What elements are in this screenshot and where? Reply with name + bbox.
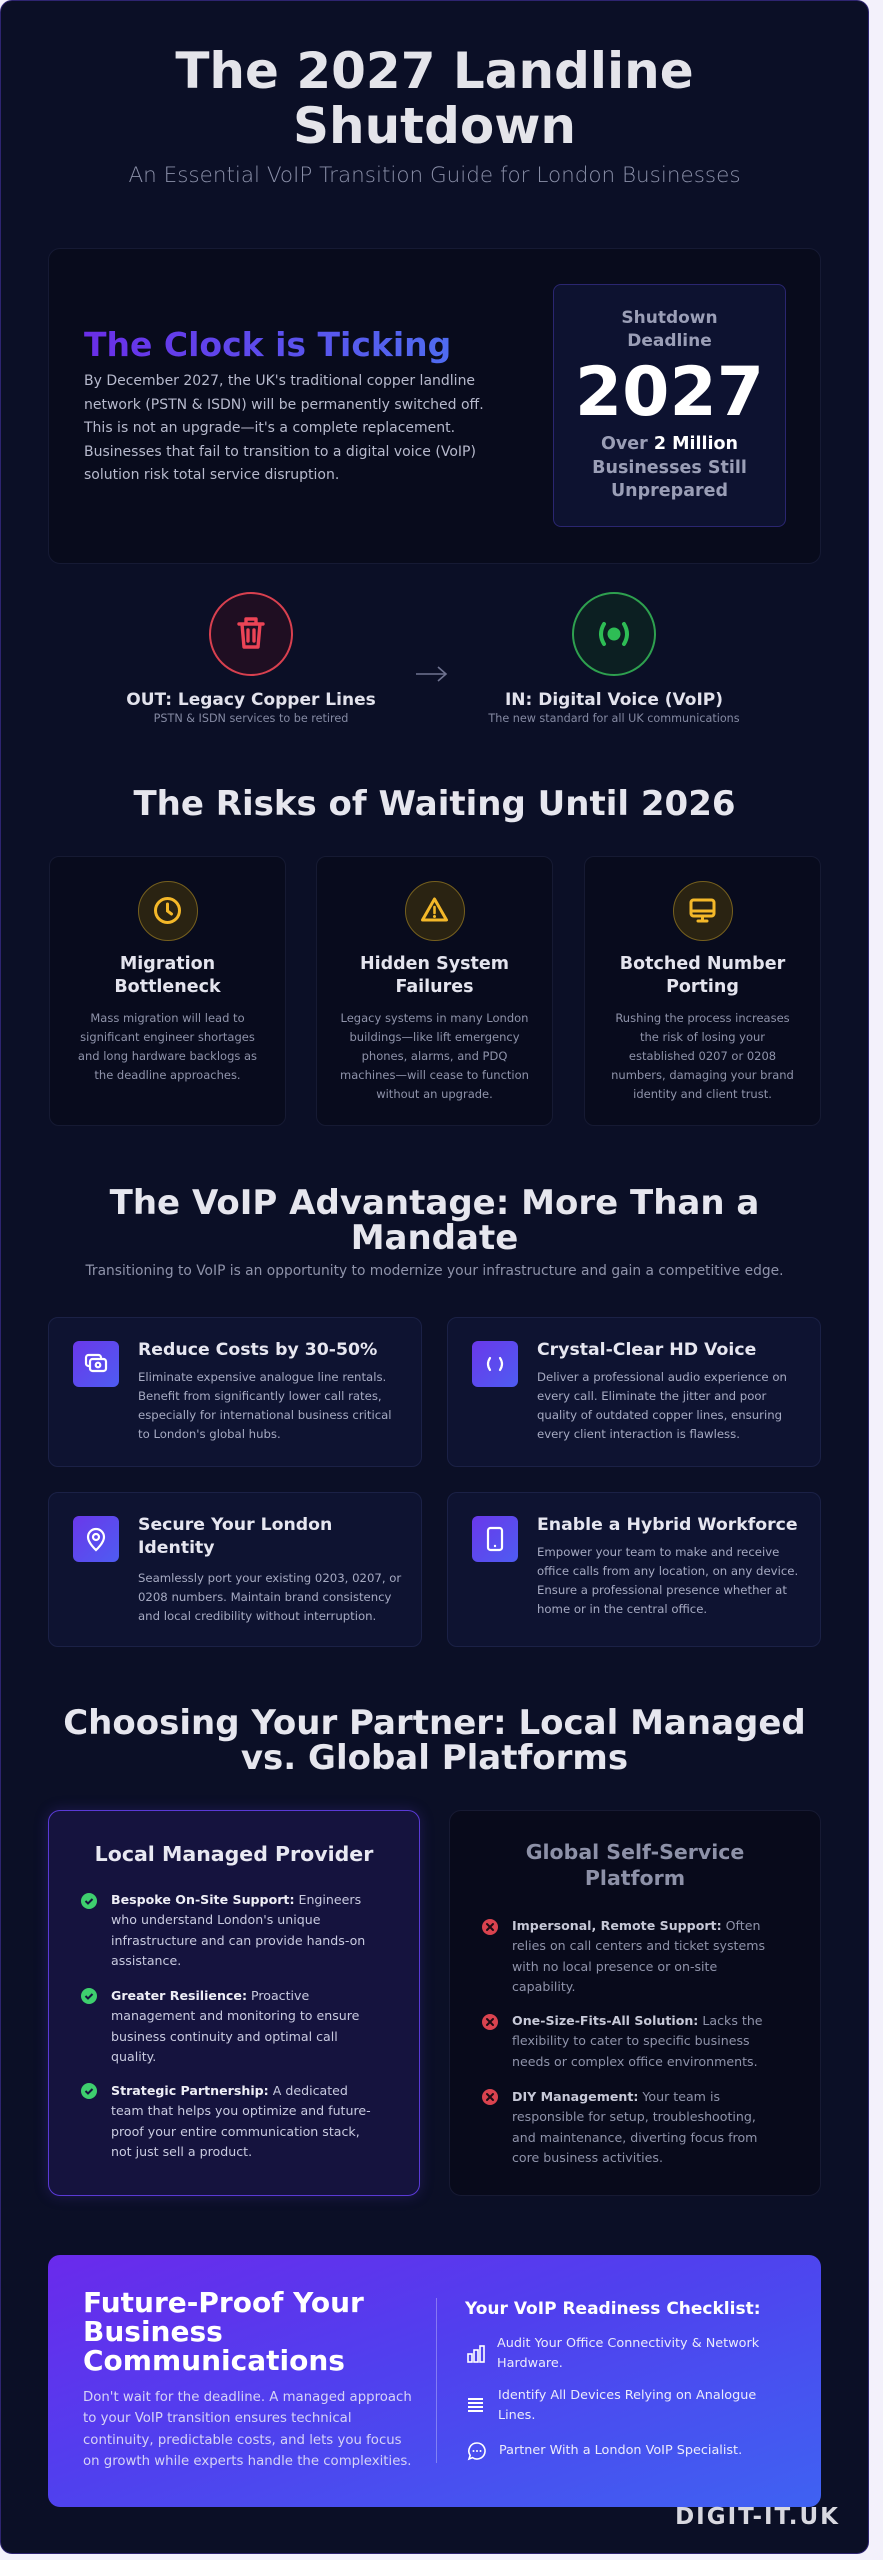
deadline box: Shutdown [621,308,718,328]
item: diy: core business activities. [512,2150,663,2165]
heading: global [526,1840,744,1890]
item: diy [512,2089,757,2165]
risk card: migration bottleneck: Migration [120,954,215,974]
icon: money [73,1341,119,1387]
label: out legacy copper [126,690,376,725]
panel: call to action [48,2255,821,2507]
adv card: reduce costs: Reduce Costs by 30-50% [138,1340,377,1360]
arrow [416,666,447,682]
icon: in voip circle [572,592,656,676]
adv card: hd voice [447,1317,821,1467]
risk card: migration bottleneck: Bottleneck [114,977,221,997]
label: in digital voice: IN: Digital Voice (VoIP) [505,690,723,710]
adv card: hybrid workforce: Ensure a professional presence whether at [537,1583,787,1597]
heading: voip advantage [110,1183,759,1258]
checklist [464,2299,761,2460]
deadline box: Unprepared [611,481,728,501]
adv card: hybrid workforce [447,1492,821,1647]
title: The 2027 Landline [175,42,694,100]
heading: local: Local Managed Provider [95,1842,373,1866]
icon: location pin [73,1516,119,1562]
risk card: number porting: Porting [666,977,739,997]
risk card: number porting: established 0207 or 0208 [629,1049,776,1063]
icons: checks [81,1893,97,2099]
adv card: reduce costs [48,1317,422,1467]
label: out legacy copper: PSTN & ISDN services to be retired [154,712,348,725]
item: resilience: Greater Resilience: Proactive management and monitoring to ensure business continuity and optimal call quality. [111,1988,359,2064]
heading: risks: The Risks of Waiting Until 2026 [133,784,736,824]
item: diy: and maintenance, diverting focus from [512,2130,757,2145]
icon: signal [472,1341,518,1387]
heading: global: Global Self-Service [526,1840,744,1864]
risk card: migration bottleneck [49,856,286,1126]
label: out legacy copper: OUT: Legacy Copper Lines [126,690,376,710]
subtitle: An Essential VoIP Transition Guide for London Businesses [128,163,741,188]
adv card: hd voice: Crystal-Clear HD Voice [537,1340,756,1360]
deadline box: 2027 [575,353,764,432]
item: one size: One-Size-Fits-All Solution: Lacks the flexibility to cater to specific business needs or complex office environments. [512,2013,763,2069]
risk card: migration bottleneck: Mass migration will lead to significant engineer shortages and long hardware backlogs as the deadline approaches. [78,1011,257,1082]
adv card: hybrid workforce: Enable a Hybrid Workforce [537,1515,798,1535]
risk card: number porting: Botched Number [620,954,785,974]
icon: monitor [673,881,733,941]
heading: choosing partner: Choosing Your Partner: Local Managed [63,1703,806,1743]
panel: the clock is ticking [48,248,821,564]
brand footer: DIGIT-IT.UK [675,2504,840,2530]
adv card: london identity [48,1492,422,1647]
item: identify: Identify All Devices Relying on Analogue Lines. [498,2388,756,2423]
icon: mobile [472,1516,518,1562]
risk card: number porting: numbers, damaging your brand [611,1068,794,1082]
body text: By December 2027, the UK's traditional copper landline network (PSTN & ISDN) will be permanently switched off. This is not an upgrade—it's a complete replacement. Businesses that fail to transition to a digital voice (VoIP) solution risk total service disruption. [84,373,484,483]
item: bespoke support: Bespoke On-Site Support: Engineers who understand London's unique infrastructure and can provide hands-on assistance. [111,1892,365,1968]
icons: crosses [482,1919,498,2105]
divider [436,2298,437,2463]
panel: local managed provider [48,1810,420,2196]
risk card: number porting: identity and client trust. [633,1087,772,1101]
heading: the clock is ticking: The Clock is Ticking [84,325,451,364]
risk card: hidden failures: Hidden System [360,954,509,974]
deadline box: Deadline [627,331,712,351]
adv card: reduce costs: Eliminate expensive analogue line rentals. Benefit from significantly lower call rates, especially for international business critical to London's global hubs. [138,1370,392,1441]
risk card: hidden failures: Failures [395,977,474,997]
panel: global self-service [449,1810,821,2196]
item: diy: responsible for setup, troubleshooting, [512,2109,756,2124]
adv card: hybrid workforce: home or in the central office. [537,1602,707,1616]
adv card: london identity: Secure Your London [138,1515,332,1535]
adv card: hybrid workforce: Empower your team to make and receive [537,1545,779,1559]
item: partnership: Strategic Partnership: A dedicated team that helps you optimize and future-proof your entire communication stack, not just sell a product. [111,2083,371,2159]
adv card: london identity: 0208 numbers. Maintain brand consistency [138,1590,391,1604]
item: diy: DIY Management: Your team is [512,2089,720,2104]
item: partner: Partner With a London VoIP Specialist. [499,2443,742,2458]
heading: voip advantage: The VoIP Advantage: More Than a [110,1183,759,1223]
adv card: london identity: and local credibility without interruption. [138,1609,376,1623]
adv card: london identity: Identity [138,1538,215,1558]
title: Shutdown [293,97,576,155]
deadline box: Businesses Still [592,458,747,478]
adv card: hd voice: Deliver a professional audio experience on every call. Eliminate the jitter and poor quality of outdated copper lines, ensuring every client interaction is flawless. [537,1370,787,1441]
heading: global: Platform [585,1866,685,1890]
risk card: hidden failures: Legacy systems in many London buildings—like lift emergency phones, alarms, and PDQ machines—will cease to function without an upgrade. [340,1011,529,1101]
heading: choosing partner [63,1703,806,1778]
icon: warning [405,881,465,941]
heading: choosing partner: vs. Global Platforms [241,1738,628,1778]
risk card: number porting: Rushing the process increases [615,1011,790,1025]
risk card: hidden failures [316,856,553,1126]
checklist title: Your VoIP Readiness Checklist: [465,2299,761,2319]
icon: clock [138,881,198,941]
risk card: number porting [584,856,821,1126]
deadline box [553,284,786,527]
heading: future-proof: Future-Proof Your Business Communications [83,2286,364,2377]
heading: voip advantage: Mandate [351,1218,518,1258]
item: impersonal: Impersonal, Remote Support: Often relies on call centers and ticket systems with no local presence or on-site capability. [512,1918,765,1994]
cta body: Don't wait for the deadline. A managed approach to your VoIP transition ensures technical continuity, predictable costs, and lets you focus on growth while experts handle the complexities. [83,2390,412,2469]
item: audit: Audit Your Office Connectivity & Network Hardware. [497,2336,759,2371]
label: in digital voice: The new standard for all UK communications [488,712,740,725]
deadline box: Over 2 Million [601,434,738,454]
adv card: london identity: Seamlessly port your existing 0203, 0207, or [138,1571,401,1585]
title [175,42,694,155]
label: in digital voice [488,690,740,725]
icon: out trash circle [209,592,293,676]
risk card: number porting: the risk of losing your [640,1030,765,1044]
adv card: hybrid workforce: office calls from any location, on any device. [537,1564,798,1578]
subtitle: voip advantage: Transitioning to VoIP is an opportunity to modernize your infrastructure and gain a competitive edge. [86,1263,783,1279]
